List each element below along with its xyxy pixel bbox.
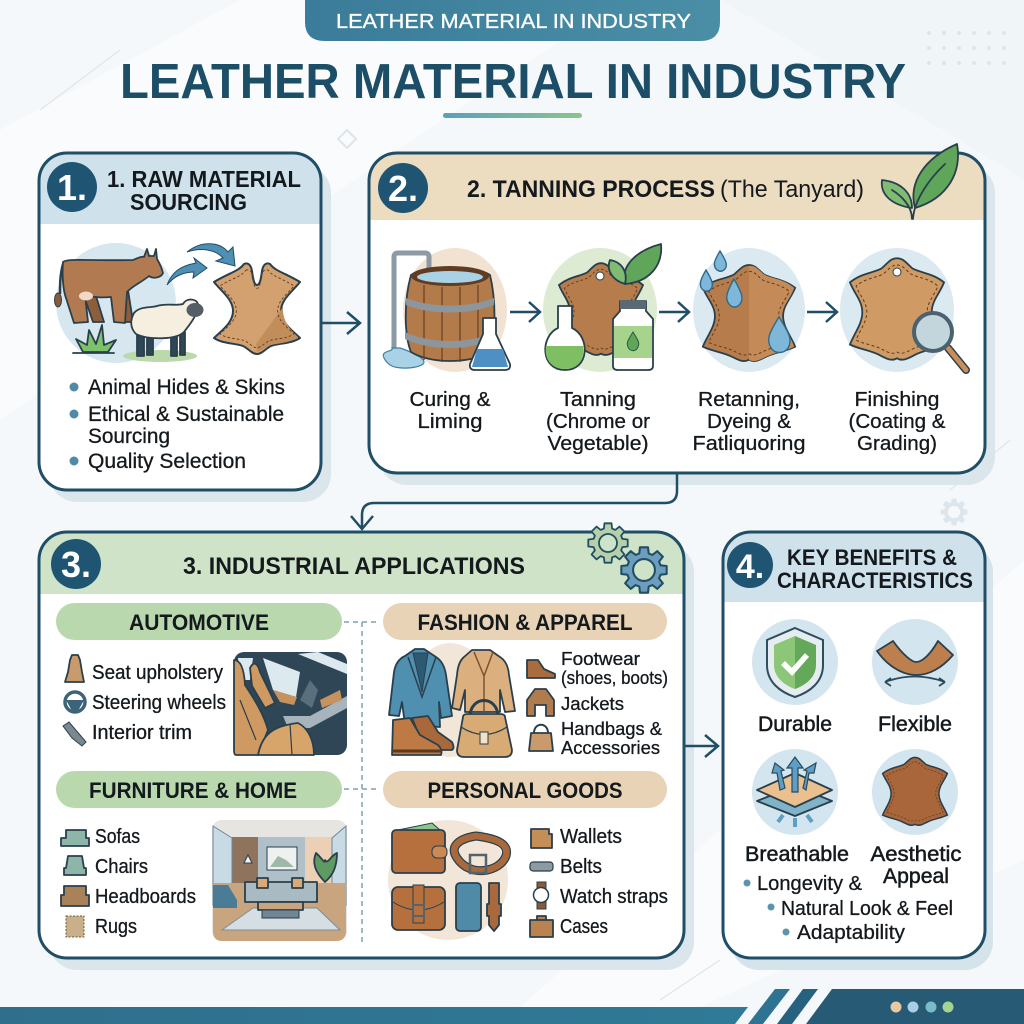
bullet list: Ethical & Sustainable	[88, 403, 284, 426]
category: furniture and home: FURNITURE & HOME	[89, 778, 297, 803]
icon: sofa	[61, 830, 89, 846]
illustration: cow, sheep and hide	[54, 243, 300, 363]
category: automotive: Interior trim	[92, 722, 192, 744]
icon: round flask	[545, 306, 585, 370]
icon: belt	[454, 836, 507, 873]
icon: barrel	[405, 266, 495, 362]
icon: leaves	[882, 144, 958, 219]
category: fashion and apparel: Footwear	[561, 649, 640, 669]
icon: steering wheel	[65, 692, 85, 712]
step labels: Grading)	[857, 433, 937, 455]
icon: tan handbag	[457, 700, 512, 757]
panel 2 heading: 2. TANNING PROCESS	[467, 176, 715, 203]
icon: water puddle	[383, 348, 424, 368]
step labels	[410, 389, 946, 455]
category: automotive: Seat upholstery	[92, 662, 223, 684]
arrow: panel 1 to 2	[322, 312, 360, 334]
step labels: Tanning	[560, 389, 636, 411]
icon: satchel	[392, 885, 445, 930]
category: personal goods: Watch straps	[560, 886, 668, 908]
badge 3: 3.	[61, 544, 91, 585]
icon: small belt	[530, 862, 553, 871]
bullet list: Animal Hides & Skins	[88, 376, 285, 399]
badge 4: 4.	[736, 548, 764, 586]
badge 3	[51, 539, 101, 589]
bullet list: Quality Selection	[88, 450, 246, 473]
badge 1: 1.	[57, 167, 87, 208]
step arrow	[510, 302, 540, 322]
benefit labels and bullet list: Natural Look & Feel	[781, 898, 953, 920]
category: automotive: AUTOMOTIVE	[129, 610, 269, 635]
footer bar	[0, 989, 1024, 1024]
badge 2	[378, 163, 428, 213]
benefit labels and bullet list: Aesthetic	[870, 843, 962, 866]
category: fashion and apparel: Handbags &	[561, 719, 662, 739]
badge 4	[727, 542, 773, 588]
step labels: Fatliquoring	[692, 433, 806, 455]
step labels: Liming	[418, 411, 482, 433]
panel 1 heading: SOURCING	[130, 189, 247, 215]
step labels: Finishing	[854, 389, 940, 411]
illustration: car interior	[234, 652, 347, 755]
panel 3 heading: 3. INDUSTRIAL APPLICATIONS	[183, 553, 525, 580]
step: tanning	[543, 244, 661, 372]
panel 2 heading: (The Tanyard)	[720, 176, 864, 203]
panel 1 heading: 1. RAW MATERIAL	[107, 166, 301, 192]
icon: gears	[588, 523, 667, 593]
icon: sheep	[131, 300, 204, 356]
icon: leaf sprig	[609, 244, 661, 284]
icon: tan coat	[452, 650, 515, 712]
icon: small wallet	[531, 829, 552, 848]
decorative dot grid	[927, 31, 1006, 65]
bullet list: Sourcing	[88, 425, 170, 448]
benefit: durable	[752, 619, 838, 736]
icon: wallet	[392, 823, 447, 873]
step: retanning and dyeing	[693, 248, 805, 372]
icon: bed	[61, 886, 89, 906]
icon: rug	[66, 916, 84, 937]
panel 4 heading: CHARACTERISTICS	[777, 568, 973, 593]
icon: curved arrows	[167, 258, 207, 285]
step arrow	[659, 302, 689, 322]
panel 4 heading: KEY BENEFITS &	[787, 545, 957, 570]
step labels: Retanning,	[698, 389, 800, 411]
step labels: Curing &	[410, 389, 491, 411]
icon: flask	[470, 318, 510, 370]
icon: phone case	[456, 883, 481, 931]
category: furniture and home: Rugs	[95, 916, 137, 938]
category: fashion and apparel: FASHION & APPAREL	[418, 610, 632, 635]
benefit: flexible: Flexible	[878, 713, 952, 736]
category: furniture and home	[56, 771, 347, 941]
icon: trim	[63, 722, 86, 746]
step arrow	[807, 302, 837, 322]
benefit: durable: Durable	[758, 713, 832, 736]
step labels: Dyeing &	[707, 411, 792, 433]
category: fashion and apparel: Jackets	[561, 694, 624, 714]
step labels: (Coating &	[848, 411, 946, 433]
icon: seat	[65, 655, 84, 682]
panel 1: raw material sourcing	[39, 153, 331, 502]
benefit: aesthetic appeal	[872, 749, 958, 835]
icon: boots	[392, 716, 454, 755]
icon: chair	[64, 856, 86, 875]
step: curing and liming	[383, 248, 510, 372]
icon: handbag	[529, 725, 553, 751]
bullet list	[70, 376, 285, 473]
benefit labels and bullet list	[744, 843, 962, 944]
header tab	[305, 0, 720, 41]
icon: small watch	[534, 882, 548, 909]
category: automotive: Steering wheels	[92, 692, 226, 714]
benefit: breathable	[752, 749, 838, 835]
benefit labels and bullet list: Longevity &	[757, 873, 863, 895]
icon: bottle	[613, 301, 653, 370]
step labels: Vegetable)	[548, 433, 648, 455]
benefit labels and bullet list: Breathable	[745, 843, 849, 866]
panel 2: tanning process	[369, 144, 995, 485]
category: personal goods: Belts	[560, 856, 602, 878]
category: furniture and home: Headboards	[95, 886, 196, 908]
category: furniture and home: Sofas	[95, 826, 140, 848]
illustration: living room	[212, 820, 347, 941]
category: personal goods: Cases	[560, 916, 608, 938]
step: finishing	[840, 248, 966, 372]
icon: grass	[76, 325, 116, 352]
icon: magnifier	[914, 313, 966, 370]
category: furniture and home: Chairs	[95, 856, 148, 878]
badge 1	[47, 162, 97, 212]
panel 4: key benefits	[723, 532, 993, 970]
arrow: panel 3 to 4	[685, 735, 718, 757]
category: personal goods	[383, 771, 668, 940]
icon: watch strap	[487, 883, 501, 931]
icon: pipe	[394, 253, 429, 350]
category: fashion and apparel: (shoes, boots)	[561, 668, 668, 688]
icon: leather hide	[214, 263, 300, 354]
icon: cow	[54, 249, 163, 323]
category: personal goods: Wallets	[560, 826, 622, 848]
header tab: LEATHER MATERIAL IN INDUSTRY	[336, 11, 691, 33]
title underline	[443, 113, 582, 118]
category: fashion and apparel	[383, 603, 668, 758]
panel 3: industrial applications	[39, 523, 694, 970]
benefit: flexible	[872, 619, 958, 736]
icon: briefcase	[530, 916, 553, 937]
arrow: panel 2 to 3	[351, 474, 677, 529]
category: automotive	[56, 603, 347, 755]
category: personal goods: PERSONAL GOODS	[428, 778, 622, 803]
step labels: (Chrome or	[546, 411, 650, 433]
category: fashion and apparel: Accessories	[561, 738, 660, 758]
benefit labels and bullet list: Adaptability	[797, 922, 905, 944]
title: LEATHER MATERIAL IN INDUSTRY	[120, 55, 906, 109]
icon: jacket	[527, 689, 554, 716]
decorative gear	[941, 499, 967, 525]
panel 2 heading	[467, 176, 864, 203]
icon: shoe	[527, 660, 555, 678]
benefit labels and bullet list: Appeal	[883, 865, 949, 888]
badge 2: 2.	[388, 168, 418, 209]
panel 4 heading	[777, 545, 973, 593]
icon: blue jacket	[389, 649, 452, 727]
panel 1 heading	[107, 166, 301, 215]
